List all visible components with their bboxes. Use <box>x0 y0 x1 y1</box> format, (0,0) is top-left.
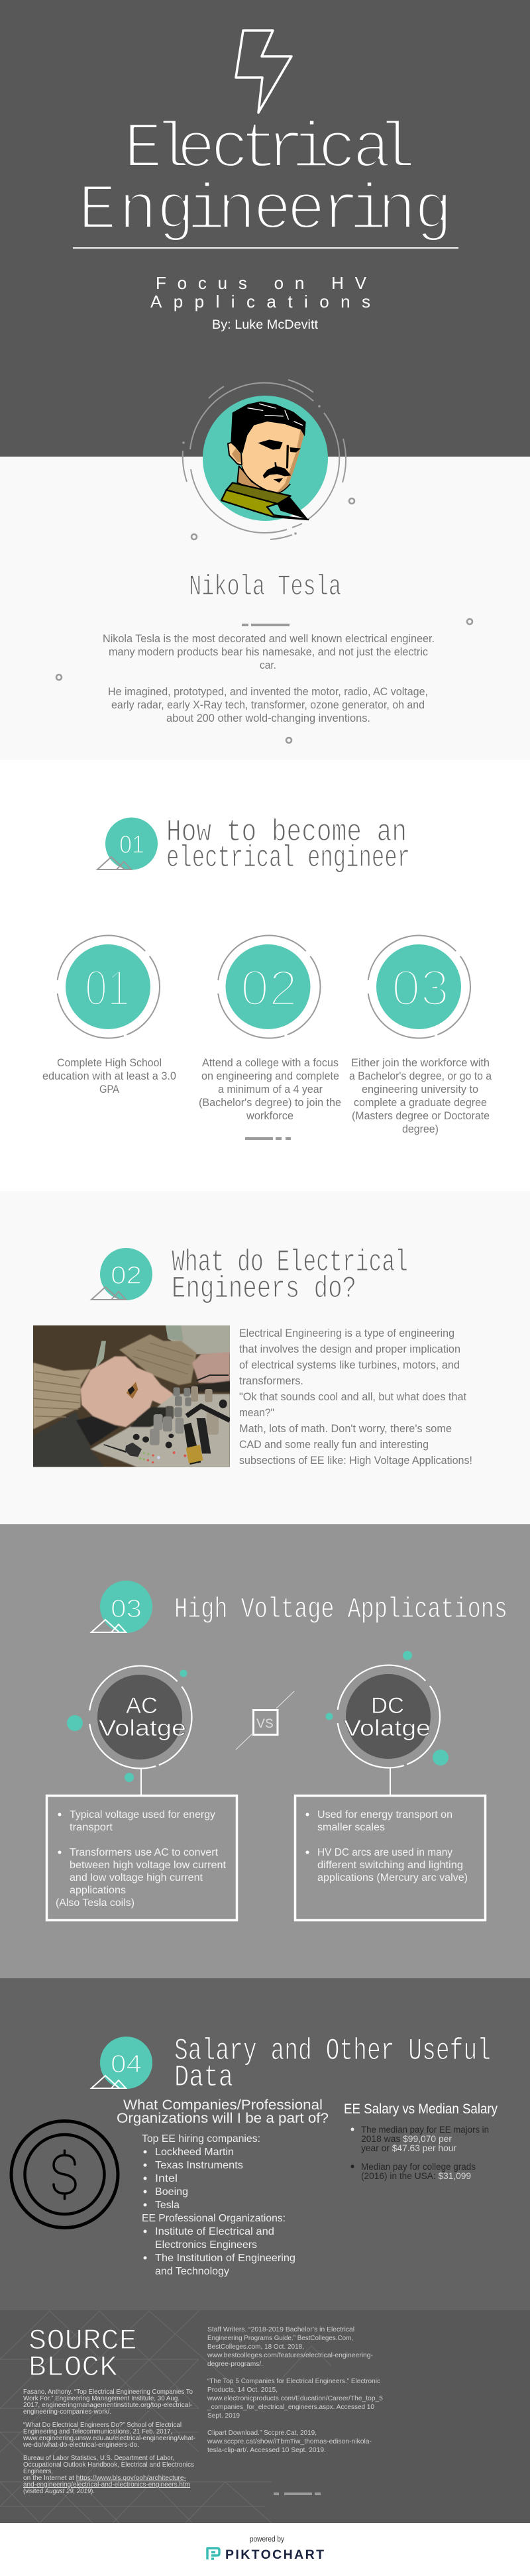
citations left <box>23 2388 195 2495</box>
AC voltage circle <box>67 1666 191 1782</box>
step 03 caption: complete a graduate degree <box>354 1097 487 1109</box>
panel: high voltage applications <box>0 1524 530 1978</box>
citations right: www.electronicproducts.com/Education/Career/The_top_5 <box>207 2395 383 2402</box>
AC details box: transport <box>70 1822 113 1833</box>
AC details box: Transformers use AC to convert <box>70 1847 219 1858</box>
step 02 <box>218 936 320 1038</box>
companies list: EE Professional Organizations: <box>142 2213 286 2224</box>
step 01 <box>58 936 160 1038</box>
step 01 caption: Complete High School <box>57 1057 162 1069</box>
VS badge: VS <box>256 1717 274 1732</box>
citations right: _companies_for_electrical_engineers.aspx. Accessed 10 <box>207 2404 374 2411</box>
step 03 caption: degree) <box>402 1123 439 1135</box>
AC details box: and low voltage high current <box>70 1872 203 1883</box>
heading: Nikola Tesla: Nikola Tesla <box>189 571 341 604</box>
panel: salary and useful data <box>0 1978 530 2310</box>
description text: Math, lots of math. Don't worry, there's some <box>239 1423 452 1435</box>
section number 04 <box>91 2037 152 2089</box>
step 01 caption <box>42 1057 176 1095</box>
Tesla biography: car. <box>260 659 276 671</box>
AC voltage circle: Volatge <box>99 1716 186 1741</box>
companies question <box>117 2098 329 2126</box>
photo: hand adjusting mixer <box>33 1325 230 1467</box>
companies list: Boeing <box>155 2186 188 2198</box>
step 02: 02 <box>240 960 297 1017</box>
icon: Piktochart logo <box>207 2548 219 2559</box>
icon: dollar coin <box>11 2121 118 2228</box>
DC details box: different switching and lighting <box>317 1860 463 1871</box>
citations left: Occupational Outlook Handbook, Electrical and Electronics <box>23 2461 194 2469</box>
step 01: 01 <box>85 960 130 1017</box>
icon: Tesla portrait <box>221 402 308 520</box>
author: By: Luke McDevitt <box>212 317 319 332</box>
salary facts: (2016) in the USA: $31,099 <box>361 2171 471 2181</box>
portrait rings <box>183 380 346 539</box>
panel: what do electrical engineers do <box>33 1248 472 1467</box>
step 03: 03 <box>392 960 449 1017</box>
Tesla biography: Nikola Tesla is the most decorated and well known electrical engineer. <box>103 633 435 645</box>
description text: subsections of EE like: High Voltage Applications! <box>239 1455 472 1467</box>
DC details box: HV DC arcs are used in many <box>317 1847 452 1858</box>
DC voltage circle: Volatge <box>344 1716 431 1741</box>
salary facts: 2018 was $99,070 per <box>361 2134 452 2144</box>
step 03 caption: engineering university to <box>362 1084 478 1095</box>
citations right: tesla-clip-art/. Accessed 10 Sept. 2019. <box>207 2447 326 2454</box>
step 02 caption: workforce <box>246 1110 293 1122</box>
description text: CAD and some really fun and interesting <box>239 1439 429 1451</box>
AC details box: between high voltage low current <box>70 1860 227 1871</box>
footer: Piktochart branding: PIKTOCHART <box>225 2548 324 2562</box>
footer: Piktochart branding: powered by <box>250 2536 284 2544</box>
citations right: “The Top 5 Companies for Electrical Engineers.” Electronic <box>207 2378 380 2385</box>
citations right: Engineering Programs Guide.” BestColleges.Com, <box>207 2335 353 2342</box>
citations left: engineering-companies-work/. <box>23 2408 111 2416</box>
citations left: 2017, engineeringmanagementinstitute.org/top-electrical- <box>23 2402 192 2409</box>
AC details box: (Also Tesla coils) <box>56 1897 134 1909</box>
description text: mean?" <box>239 1407 274 1419</box>
step 03 caption: (Masters degree or Doctorate <box>352 1110 490 1122</box>
companies list <box>142 2133 295 2277</box>
citations left: “What Do Electrical Engineers Do?” School of Electrical <box>23 2422 182 2429</box>
citations left: Engineering and Telecommunications, 21 Feb. 2017, <box>23 2428 172 2436</box>
citations left: Engineers, <box>23 2468 53 2475</box>
heading: source block: SOURCE <box>28 2325 137 2358</box>
section number 02: 02 <box>111 1262 142 1290</box>
panel: source block <box>0 2310 530 2523</box>
subtitle: Focus on HV <box>156 273 367 293</box>
subtitle <box>150 273 370 311</box>
companies list: Electronics Engineers <box>155 2239 257 2251</box>
citations left: Work For.” Engineering Management Institute, 30 Aug. <box>23 2395 180 2402</box>
citations right: BestColleges.com, 18 Oct. 2018, <box>207 2343 304 2351</box>
AC details box <box>46 1767 390 1921</box>
VS badge <box>236 1691 294 1750</box>
AC voltage circle: AC <box>126 1693 158 1718</box>
step 02 caption: a minimum of a 4 year <box>218 1084 323 1095</box>
description text: "Ok that sounds cool and all, but what does that <box>239 1391 466 1403</box>
companies list: The Institution of Engineering <box>155 2253 295 2264</box>
description text: of electrical systems like turbines, motors, and <box>239 1359 460 1371</box>
Tesla biography: early radar, early X-Ray tech, transformer, ozone generator, oh and <box>111 699 425 711</box>
companies list: and Technology <box>155 2266 229 2277</box>
DC details box: Used for energy transport on <box>317 1809 452 1820</box>
DC details box: applications (Mercury arc valve) <box>317 1872 468 1883</box>
salary facts: The median pay for EE majors in <box>361 2125 489 2135</box>
decorative dots <box>56 498 472 743</box>
section number 02 <box>91 1248 152 1300</box>
citations right: degree-programs/. <box>207 2361 263 2368</box>
heading: salary: Data <box>174 2060 233 2095</box>
citations right: www.sccpre.cat/show/iTbmTiw_thomas-edison-nikola- <box>207 2438 372 2445</box>
step 03 caption: Either join the workforce with <box>351 1057 490 1069</box>
step 01 caption: education with at least a 3.0 <box>42 1070 176 1082</box>
description text: Electrical Engineering is a type of engineering <box>239 1327 454 1339</box>
citations left: (visited August 29, 2019). <box>23 2488 95 2495</box>
companies list: Intel <box>155 2173 178 2184</box>
Tesla biography: about 200 other wold-changing inventions. <box>166 712 370 724</box>
Tesla biography: He imagined, prototyped, and invented the motor, radio, AC voltage, <box>108 686 428 698</box>
DC details box <box>295 1796 485 1921</box>
citations left: and-engineering/electrical-and-electronics-engineers.htm <box>23 2481 190 2489</box>
citations left: Bureau of Labor Statistics, U.S. Department of Labor, <box>23 2455 174 2462</box>
panel: how to become an engineer <box>42 815 492 1140</box>
heading: salary <box>174 2034 491 2095</box>
heading: how to become: electrical engineer <box>166 841 410 875</box>
portrait circle <box>203 396 328 521</box>
salary facts: year or $47.63 per hour <box>361 2143 457 2153</box>
heading: what do engineers do: What do Electrical <box>172 1245 408 1280</box>
salary facts <box>351 2125 489 2181</box>
salary facts: Median pay for college grads <box>361 2162 476 2172</box>
step 03 <box>368 936 470 1038</box>
heading: what do engineers do: Engineers do? <box>172 1272 356 1306</box>
heading: source block: BLOCK <box>28 2351 118 2384</box>
citations right <box>207 2326 383 2454</box>
heading: what do engineers do <box>172 1245 408 1306</box>
section number 01 <box>97 818 158 869</box>
citations right: Sept. 2019 <box>207 2412 240 2420</box>
title: Engineering <box>78 175 452 248</box>
section number 03 <box>91 1581 152 1633</box>
citations left: Fasano, Anthony. “Top Electrical Engineering Companies To <box>23 2388 193 2396</box>
companies list: Lockheed Martin <box>155 2147 234 2158</box>
citations right: Staff Writers. “2018-2019 Bachelor’s in Electrical <box>207 2326 354 2333</box>
section number 01: 01 <box>119 831 144 859</box>
subtitle: Applications <box>150 292 370 311</box>
step 02 caption <box>199 1057 341 1122</box>
citations left: we-do/what-do-electrical-engineers-do. <box>23 2441 139 2449</box>
citations left: on the Internet at https://www.bls.gov/ooh/architecture- <box>23 2475 186 2482</box>
step 02 caption: Attend a college with a focus <box>202 1057 339 1069</box>
companies list: Texas Instruments <box>155 2160 243 2171</box>
heading: how to become <box>166 815 410 875</box>
citations left: www.engineering.unsw.edu.au/electrical-engineering/what- <box>23 2435 195 2442</box>
description text: transformers. <box>239 1375 303 1387</box>
citations right: www.bestcolleges.com/features/electrical-engineering- <box>207 2352 373 2359</box>
description text <box>239 1327 472 1467</box>
icon: lightning bolt <box>236 30 292 113</box>
citations right: Clipart Download.” Sccpre.Cat, 2019, <box>207 2430 317 2437</box>
salary heading: EE Salary vs Median Salary <box>344 2101 498 2117</box>
footer: Piktochart branding <box>207 2536 324 2562</box>
companies list: Top EE hiring companies: <box>142 2133 260 2145</box>
title: Electrical <box>124 113 415 186</box>
section number 04: 04 <box>111 2050 142 2078</box>
companies question: Organizations will I be a part of? <box>117 2111 329 2126</box>
panel: title header <box>0 0 530 457</box>
step 02 caption: (Bachelor's degree) to join the <box>199 1097 341 1109</box>
DC voltage circle <box>326 1651 449 1767</box>
DC voltage circle: DC <box>371 1693 404 1718</box>
companies list: Tesla <box>155 2200 180 2211</box>
AC details box: applications <box>70 1885 126 1896</box>
heading: source block <box>28 2325 137 2384</box>
DC details box: smaller scales <box>317 1822 385 1833</box>
Tesla biography <box>103 633 435 724</box>
panel: Nikola Tesla <box>0 380 530 760</box>
heading: how to become: How to become an <box>166 815 407 850</box>
step 03 caption: a Bachelor's degree, or go to a <box>349 1070 492 1082</box>
AC details box: Typical voltage used for energy <box>70 1809 215 1820</box>
step 03 caption <box>349 1057 492 1135</box>
companies question: What Companies/Professional <box>123 2098 323 2113</box>
description text: that involves the design and proper implication <box>239 1343 460 1355</box>
step 01 caption: GPA <box>99 1084 119 1095</box>
citations right: Products, 14 Oct. 2015, <box>207 2386 278 2394</box>
Tesla biography: many modern products bear his namesake, and not just the electric <box>109 646 428 658</box>
title <box>78 113 452 248</box>
companies list: Institute of Electrical and <box>155 2226 274 2237</box>
step 02 caption: on engineering and complete <box>201 1070 339 1082</box>
section number 03: 03 <box>111 1595 142 1623</box>
